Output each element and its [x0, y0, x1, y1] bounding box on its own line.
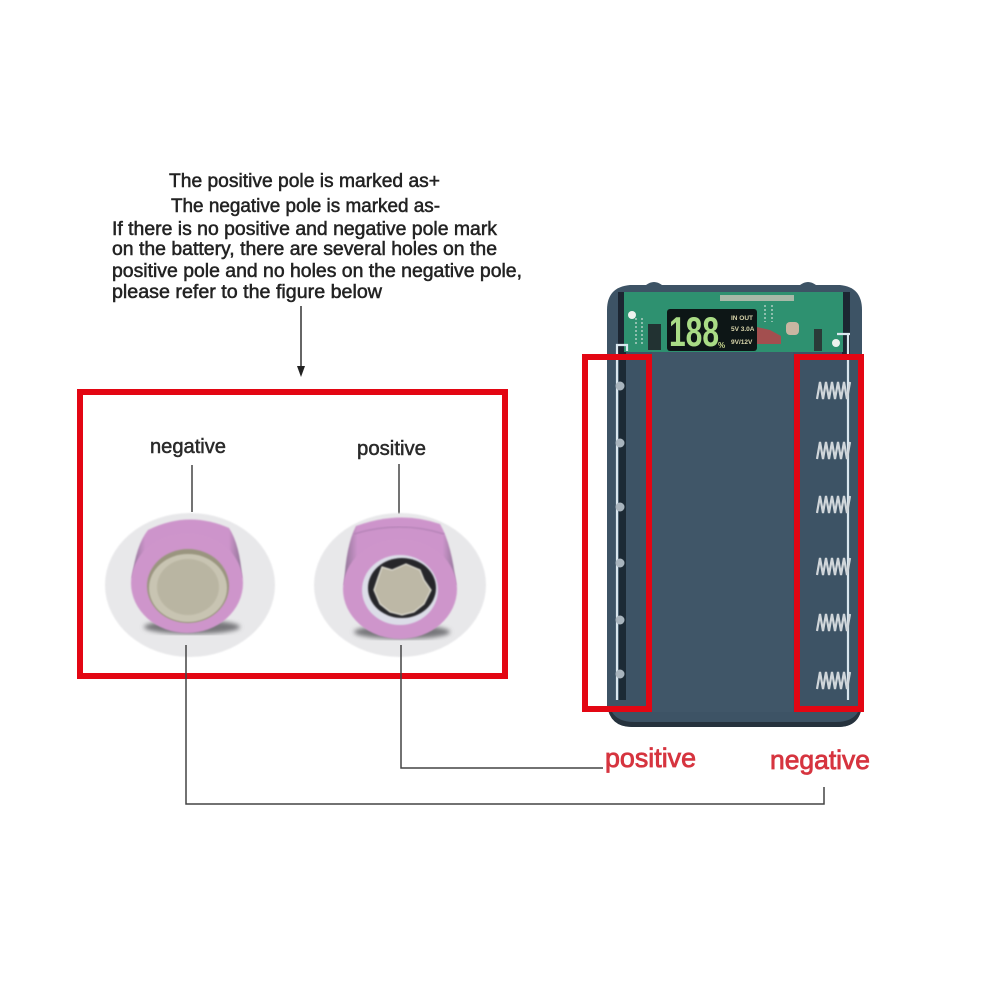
- instruction text block: [112, 171, 522, 303]
- digital display: 5V 3.0A: [731, 326, 755, 333]
- connector: negative label stem: [191, 465, 193, 512]
- instruction text block: The positive pole is marked as+: [169, 171, 440, 192]
- highlight: negative contacts red frame: [797, 357, 861, 709]
- connector: positive label stem: [398, 464, 400, 514]
- positive contact buttons: [616, 382, 624, 678]
- digital display: 188: [669, 308, 719, 355]
- circuit board: [624, 292, 843, 352]
- instruction text block: on the battery, there are several holes on the: [112, 239, 497, 260]
- arrow: down to battery figure: [297, 306, 305, 377]
- digital display: IN OUT: [731, 315, 753, 322]
- digital display: 9V/12V: [731, 339, 753, 346]
- white contact strips: [617, 345, 627, 700]
- panel: battery comparison red frame: [80, 392, 505, 676]
- dark contact channel: [619, 360, 626, 700]
- label: negative red: negative: [770, 745, 870, 775]
- connector: positive battery to positive label: [401, 645, 603, 768]
- instruction text block: please refer to the figure below: [112, 282, 382, 303]
- negative springs: [817, 382, 850, 689]
- icon: negative battery end: [105, 513, 275, 657]
- digital display: %: [718, 341, 725, 350]
- label: negative: negative: [150, 436, 226, 458]
- panel: power bank case: [607, 282, 862, 727]
- icon: positive battery end: [314, 513, 486, 657]
- label: positive: positive: [357, 438, 426, 460]
- instruction text block: positive pole and no holes on the negative pole,: [112, 261, 522, 282]
- instruction text block: The negative pole is marked as-: [171, 196, 440, 217]
- instruction text block: If there is no positive and negative pole mark: [112, 219, 497, 240]
- highlight: positive contacts red frame: [585, 357, 649, 709]
- label: positive red: positive: [605, 743, 696, 773]
- connector: negative battery to negative label: [186, 645, 824, 804]
